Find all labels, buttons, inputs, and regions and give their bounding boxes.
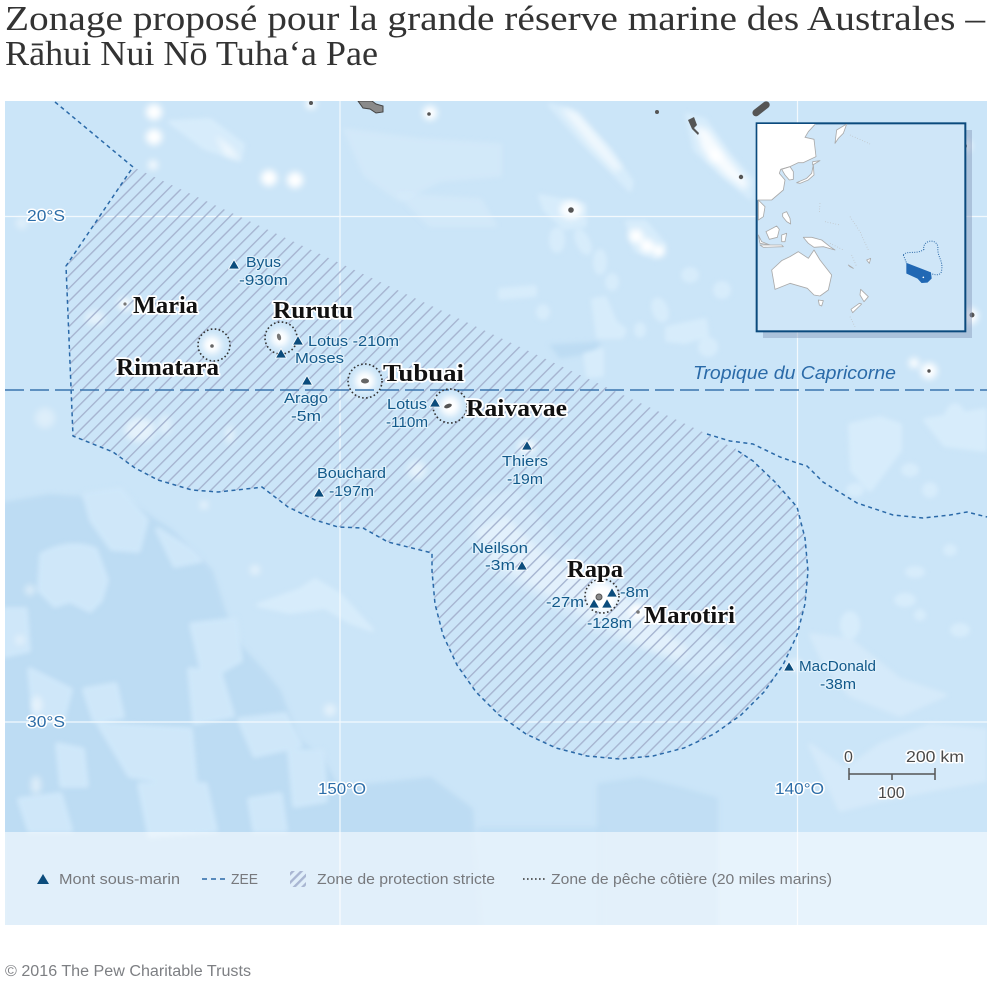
ZEE boundary: [55, 102, 987, 759]
island names: [116, 293, 735, 629]
scale bar: 0: [844, 749, 853, 766]
shallow banks: [5, 490, 325, 835]
deep ocean areas: [5, 342, 716, 832]
graticule labels: 140°O: [775, 781, 824, 798]
scale bar: 100: [878, 785, 905, 802]
seamount labels: Byus: [246, 254, 281, 271]
legend item: ZEE: [202, 871, 258, 888]
legend panel: [5, 832, 987, 925]
inset locator map: [757, 123, 972, 338]
seamount labels: -27m: [546, 594, 584, 611]
island names: Rapa: [567, 557, 623, 583]
legend item: seamount: Mont sous-marin: [59, 871, 180, 888]
seamount labels: Thiers: [502, 453, 548, 470]
seamount labels: -128m: [587, 615, 632, 632]
seamount labels: -8m: [620, 584, 649, 601]
seamount labels: -19m: [507, 471, 543, 488]
top islands: [309, 100, 974, 373]
title: Zonage proposé pour la grande réserve marine des Australes –: [5, 0, 986, 38]
island names: Rurutu: [273, 298, 353, 324]
island names: Marotiri: [644, 603, 735, 629]
seamount labels: Lotus -210m: [308, 333, 399, 350]
graticule labels: 150°O: [318, 781, 366, 798]
legend item: coastal fishing zone: Zone de pêche côtière (20 miles marins): [551, 871, 832, 888]
seamount labels: -197m: [329, 483, 374, 500]
seamount labels: MacDonald: [799, 658, 876, 675]
seamount labels: -5m: [291, 408, 321, 425]
seamount labels: Moses: [295, 350, 344, 367]
seamount labels: Neilson: [472, 540, 528, 557]
island shapes and coastal zones: [123, 302, 640, 614]
graticule labels: 20°S: [27, 208, 65, 225]
seamount labels: -38m: [820, 676, 856, 693]
graticule labels: 30°S: [27, 714, 65, 731]
title: Rāhui Nui Nō Tuhaʻa Pae: [5, 34, 378, 73]
scale bar: [844, 749, 964, 802]
seamount labels: [239, 254, 876, 693]
tropic of Capricorn line: [5, 389, 987, 391]
zone de protection stricte: [66, 167, 808, 759]
island names: Rimatara: [116, 355, 219, 381]
seamount labels: Arago: [284, 390, 328, 407]
legend item: strict protection zone: Zone de protection stricte: [317, 871, 495, 888]
copyright: © 2016 The Pew Charitable Trusts: [5, 963, 251, 980]
seamount labels: -110m: [386, 414, 428, 431]
island names: Tubuai: [383, 361, 464, 387]
seamount markers: [228, 260, 794, 671]
island names: Maria: [133, 293, 198, 319]
seamount labels: -3m: [485, 557, 515, 574]
island names: Raivavae: [466, 396, 567, 422]
seamount labels: Bouchard: [317, 465, 386, 482]
bright seamounts and reefs: [15, 99, 978, 794]
tropic label: Tropique du Capricorne: [693, 363, 896, 383]
title: [5, 0, 986, 73]
seamount labels: -930m: [239, 272, 288, 289]
graticule labels: [27, 208, 824, 798]
legend item: ZEE: ZEE: [231, 871, 258, 888]
seamount labels: Lotus: [387, 396, 427, 413]
scale bar: 200 km: [906, 749, 964, 766]
